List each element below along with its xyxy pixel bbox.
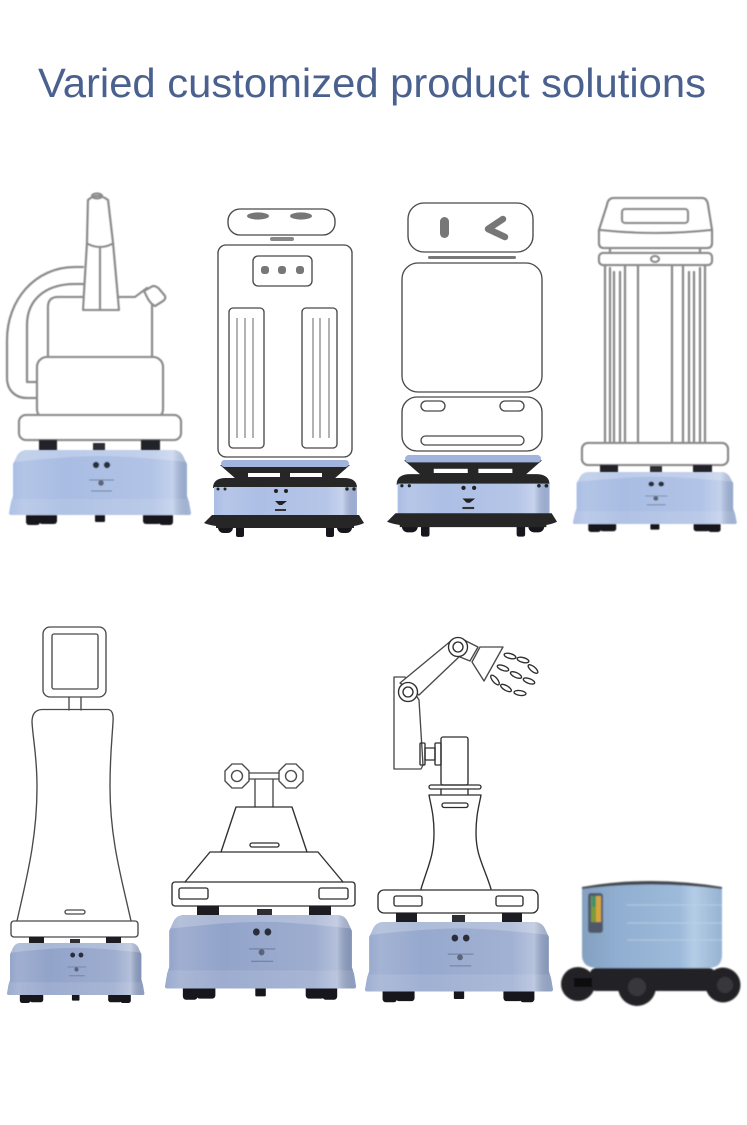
shoulder joint and post: [420, 737, 481, 794]
chassis base: [7, 943, 144, 1003]
robot: UV lamp disinfection: [573, 198, 737, 532]
sprayer line art: [7, 194, 181, 440]
robot: service robot with tall vented body: [204, 209, 364, 537]
cargo body: [582, 881, 722, 968]
tapered body and plate: [378, 795, 538, 913]
wheel chassis: [561, 967, 740, 1006]
lamp line art: [582, 198, 728, 465]
body panels: [402, 263, 542, 451]
chassis base: [165, 915, 356, 1000]
camera head: [225, 764, 303, 807]
robot: service robot with blank panels: [387, 203, 557, 537]
head with eyes: [228, 209, 335, 241]
robot: advertising screen guide: [7, 627, 144, 1003]
stepped housing: [172, 807, 355, 906]
screen on cart: [588, 893, 603, 933]
robot: atomizing disinfection sprayer: [7, 194, 191, 525]
body with vent panels: [218, 245, 352, 457]
screen: [43, 627, 106, 710]
title: Varied customized product solutions: [38, 60, 706, 106]
head with face: [408, 203, 533, 259]
chassis base: [9, 450, 191, 525]
robot: delivery cart: [561, 881, 740, 1006]
black chassis base: [204, 460, 364, 537]
robot: dual camera inspection: [165, 764, 356, 1000]
black chassis base: [387, 455, 557, 537]
robotic arm and hand: [394, 638, 539, 769]
chassis base: [573, 472, 737, 532]
tower body: [11, 710, 138, 937]
chassis base: [365, 922, 553, 1002]
robot: arm manipulator: [365, 638, 553, 1002]
